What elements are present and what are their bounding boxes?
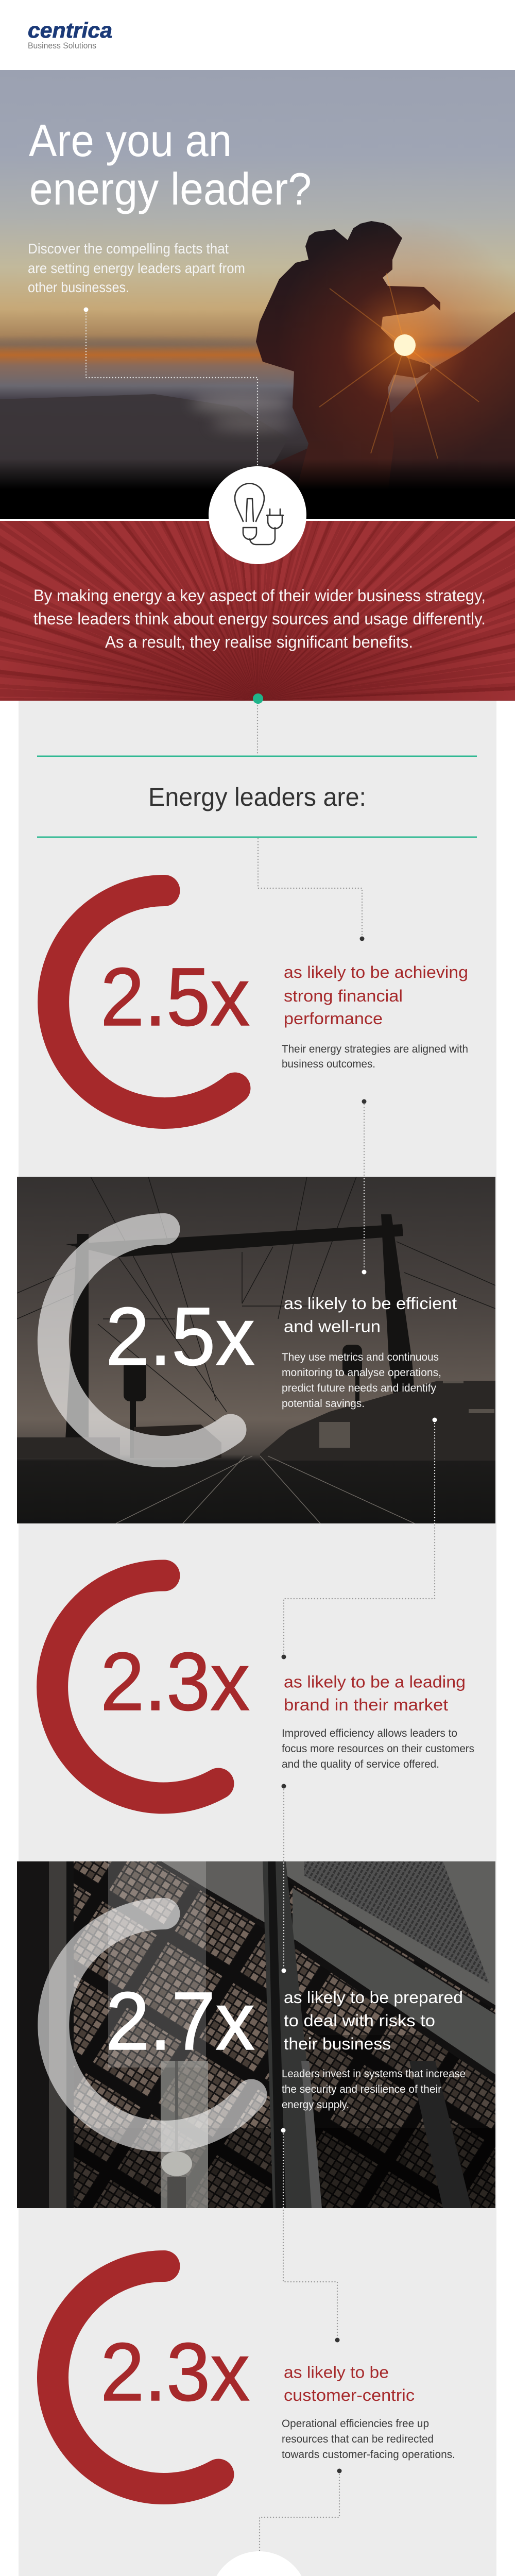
connector: stat 1 to stat 2 lower bbox=[362, 1179, 367, 1275]
ring gauge 2 bbox=[53, 1229, 231, 1451]
ring gauge 5 bbox=[53, 2266, 218, 2488]
heading text 2 bbox=[284, 1294, 457, 1335]
text: red band statement bbox=[33, 586, 486, 651]
body text 2: monitoring to analyse operations, bbox=[282, 1367, 441, 1379]
connector: hero dotted line bbox=[83, 307, 258, 466]
body text 2: They use metrics and continuous bbox=[282, 1351, 439, 1363]
heading text 5: as likely to be bbox=[284, 2363, 389, 2381]
title: energy leader? bbox=[29, 163, 312, 214]
body text 2 bbox=[282, 1351, 441, 1410]
icon: double check circle bbox=[210, 2551, 308, 2576]
heading text 4: as likely to be prepared bbox=[284, 1988, 463, 2007]
heading text 3 bbox=[284, 1672, 466, 1714]
body text 2: predict future needs and identify bbox=[282, 1382, 436, 1394]
intro text: are setting energy leaders apart from bbox=[28, 260, 245, 276]
body text 4: the security and resilience of their bbox=[282, 2083, 441, 2095]
title: Are you an bbox=[29, 115, 232, 166]
body text 3: and the quality of service offered. bbox=[282, 1758, 439, 1770]
body text 3 bbox=[282, 1727, 474, 1770]
ring gauge 4 bbox=[54, 1913, 251, 2136]
panel: stat 3 leading brand bbox=[53, 1575, 474, 1798]
panel: stat 4 architecture photo bbox=[17, 1861, 495, 2208]
ring gauge 3 bbox=[53, 1575, 218, 1798]
body text 1: Their energy strategies are aligned with bbox=[282, 1043, 468, 1055]
number 2.3x second: 2.3x bbox=[100, 2326, 250, 2418]
panel: stat 1 financial performance bbox=[54, 890, 468, 1113]
heading text 5: customer-centric bbox=[284, 2386, 415, 2404]
body text 5 bbox=[282, 2418, 455, 2461]
body text 5: Operational efficiencies free up bbox=[282, 2418, 429, 2430]
heading text 4: to deal with risks to bbox=[284, 2011, 435, 2030]
heading text 1: strong financial bbox=[284, 987, 403, 1005]
connector: stat 5 to closing bbox=[260, 2469, 342, 2551]
connector: stat 1 to stat 2 upper bbox=[362, 1099, 367, 1177]
heading: energy leaders are: Energy leaders are: bbox=[148, 783, 366, 811]
logo: centrica header: centrica bbox=[28, 18, 112, 42]
text: red band statement: these leaders think about energy sources and usage differently. bbox=[33, 609, 486, 628]
heading text 5 bbox=[284, 2363, 415, 2404]
number 2.3x: 2.3x bbox=[100, 1635, 250, 1727]
connector: stat 3 to stat 4 lower bbox=[281, 1863, 286, 1973]
number 2.7x white: 2.7x bbox=[106, 1975, 255, 2067]
heading text 2: as likely to be efficient bbox=[284, 1294, 457, 1313]
heading text 2: and well-run bbox=[284, 1317, 381, 1335]
heading text 4 bbox=[284, 1988, 463, 2053]
heading text 3: brand in their market bbox=[284, 1696, 448, 1714]
heading text 3: as likely to be a leading bbox=[284, 1672, 466, 1691]
panel: red intro band background bbox=[0, 521, 515, 701]
connector: stat 2 to stat 3 bbox=[281, 1418, 437, 1659]
heading text 1 bbox=[284, 963, 468, 1028]
heading text 4: their business bbox=[284, 2035, 391, 2053]
intro text bbox=[28, 241, 245, 295]
heading text 1: performance bbox=[284, 1009, 383, 1028]
connector: stat 3 to stat 4 upper bbox=[281, 1784, 286, 1861]
number 2.5x white: 2.5x bbox=[106, 1290, 255, 1382]
connector: stat 4 to stat 5 bbox=[281, 2128, 340, 2342]
body text 5: towards customer-facing operations. bbox=[282, 2449, 455, 2461]
body text 1: business outcomes. bbox=[282, 1058, 375, 1070]
ring gauge 1 bbox=[54, 890, 235, 1113]
number 2.5x: 2.5x bbox=[100, 951, 250, 1043]
body text 4: energy supply. bbox=[282, 2099, 349, 2111]
text: red band statement: As a result, they realise significant benefits. bbox=[105, 633, 413, 651]
icon: bulb and plug circle bbox=[209, 466, 306, 564]
icon: green node bbox=[253, 693, 263, 704]
connector: heading to stat 1 bbox=[258, 839, 365, 941]
logo: centrica header: Business Solutions bbox=[28, 41, 96, 50]
body text 5: resources that can be redirected bbox=[282, 2433, 434, 2445]
title bbox=[29, 115, 312, 214]
body text 2: potential savings. bbox=[282, 1398, 365, 1410]
body text 1 bbox=[282, 1043, 468, 1070]
panel: stat 5 customer-centric bbox=[53, 2266, 455, 2488]
body text 4 bbox=[282, 2068, 466, 2111]
body text 3: focus more resources on their customers bbox=[282, 1743, 474, 1755]
body text 4: Leaders invest in systems that increase bbox=[282, 2068, 466, 2080]
heading text 1: as likely to be achieving bbox=[284, 963, 468, 981]
panel: grey stats background bbox=[19, 701, 496, 2576]
connector: to section heading bbox=[257, 706, 258, 753]
intro text: Discover the compelling facts that bbox=[28, 241, 229, 257]
panel: stat 2 railway photo bbox=[17, 1177, 495, 1523]
text: red band statement: By making energy a key aspect of their wider business strategy, bbox=[33, 586, 486, 605]
body text 3: Improved efficiency allows leaders to bbox=[282, 1727, 457, 1739]
intro text: other businesses. bbox=[28, 279, 129, 295]
panel: hero photo climber at sunset bbox=[0, 70, 515, 519]
